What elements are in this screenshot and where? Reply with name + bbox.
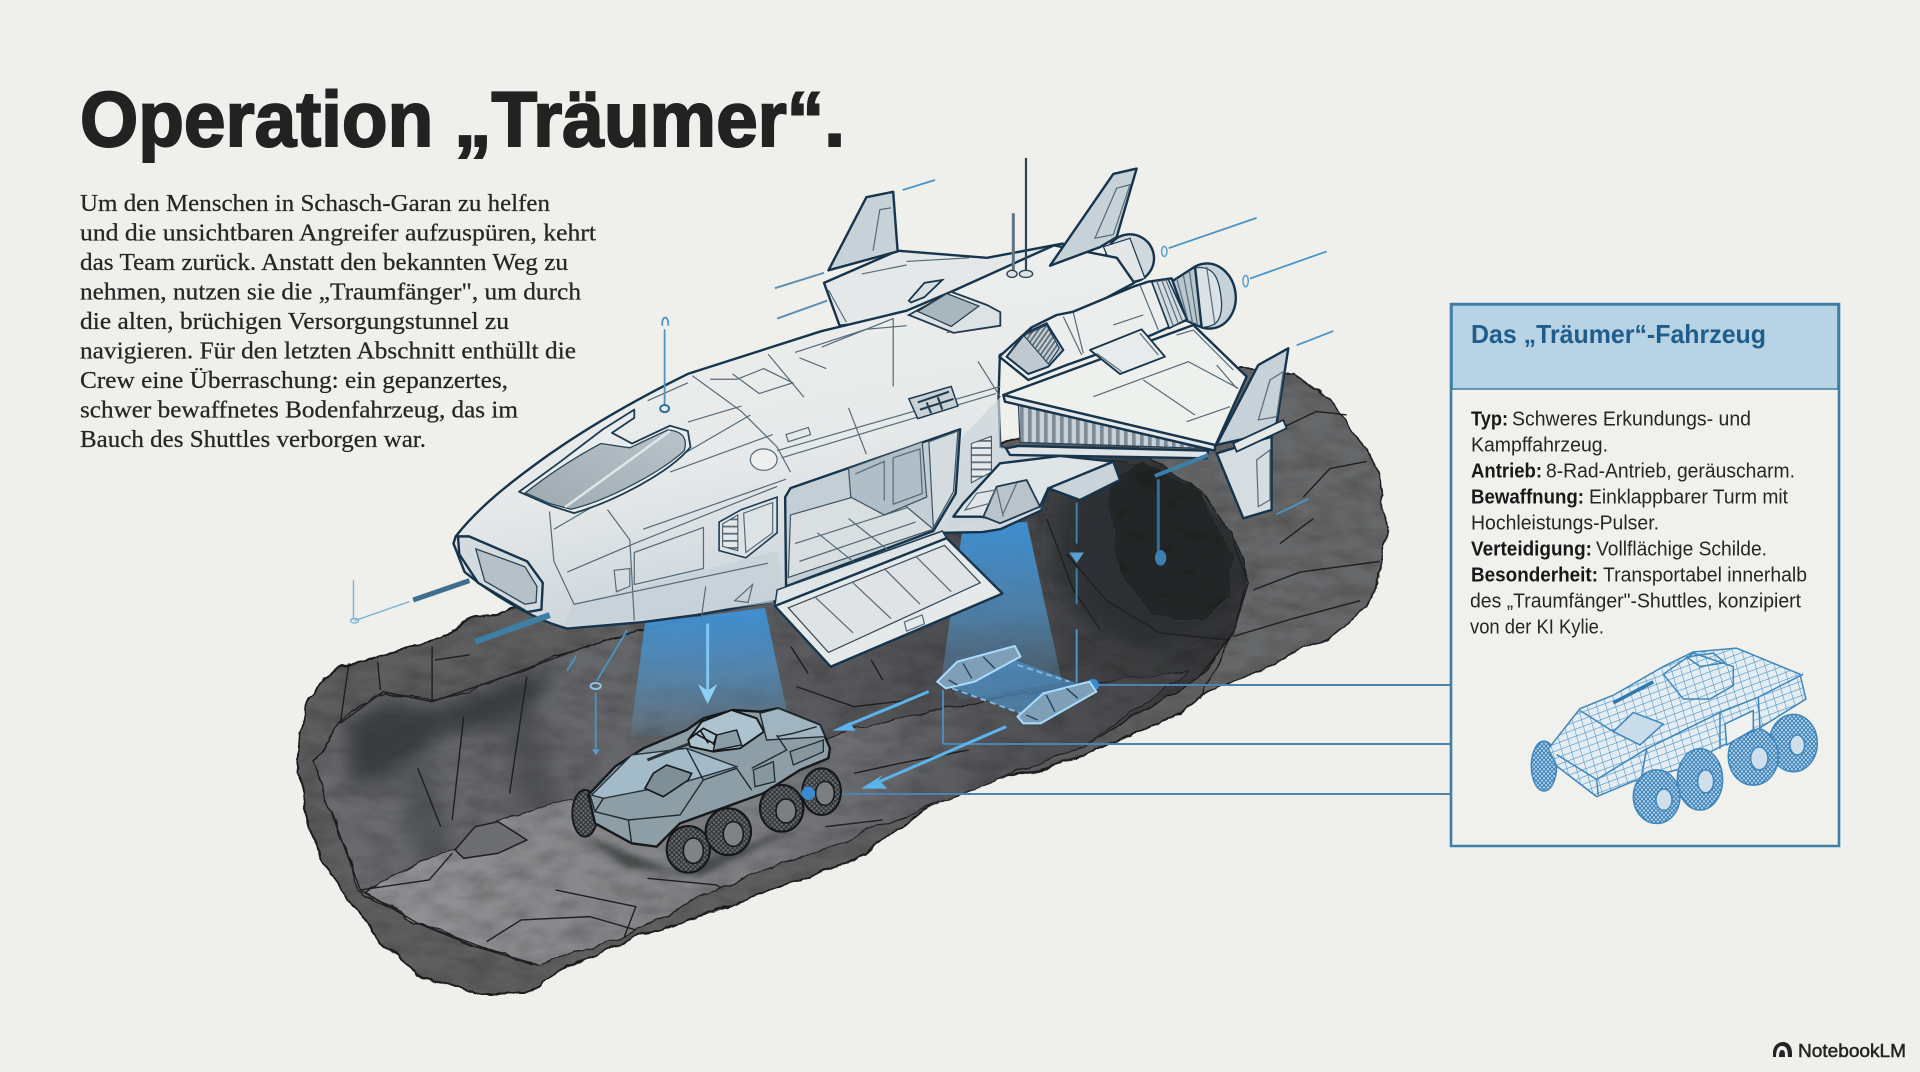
wireframe rear wheels xyxy=(1728,714,1817,785)
tunnel wall shadows xyxy=(345,665,560,790)
NotebookLM logo xyxy=(1773,1041,1906,1061)
tunnel inner wall xyxy=(314,461,1248,965)
hull body xyxy=(588,708,830,847)
top pointer xyxy=(660,318,669,412)
info panel: Das „Träumer“-Fahrzeug xyxy=(1451,304,1839,846)
hull panel lines xyxy=(549,311,1000,620)
belly box xyxy=(1048,462,1120,500)
rear wheel marker xyxy=(802,787,815,800)
specification list: Verteidigung: xyxy=(1471,538,1592,560)
wireframe front wheels xyxy=(1633,749,1723,823)
main wing xyxy=(1003,325,1247,447)
road wheels xyxy=(706,768,841,855)
hull light top xyxy=(592,748,737,798)
specification list: Einklappbarer Turm mit xyxy=(1589,486,1788,508)
tunnel floor xyxy=(366,670,1190,965)
door opening interior xyxy=(785,429,960,586)
back fin xyxy=(828,192,898,270)
specification list: Antrieb: xyxy=(1471,460,1542,482)
door back wall xyxy=(849,442,927,515)
driver hatch xyxy=(645,765,692,797)
intro text block xyxy=(80,191,596,453)
logo wordmark: NotebookLM xyxy=(1798,1041,1906,1061)
specification list: des „Traumfänger"-Shuttles, konzipiert xyxy=(1470,590,1801,612)
intro text block: Um den Menschen in Schasch-Garan zu helfen xyxy=(80,191,550,217)
intro text block: nehmen, nutzen sie die „Traumfänger", um durch xyxy=(80,280,581,306)
intro text block: Bauch des Shuttles verborgen war. xyxy=(80,427,426,453)
specification list: Vollflächige Schilde. xyxy=(1596,538,1767,560)
specification list: Besonderheit: xyxy=(1471,564,1598,586)
canopy glass xyxy=(525,430,685,509)
side hatch xyxy=(614,527,753,602)
rear engine xyxy=(1102,230,1158,287)
intro text block: das Team zurück. Anstatt den bekannten Weg zu xyxy=(80,250,568,276)
intro text block: Crew eine Überraschung: ein gepanzertes, xyxy=(80,368,508,394)
antennas xyxy=(1007,158,1033,277)
wireframe vehicle xyxy=(1531,648,1817,823)
rear upper fin xyxy=(1217,348,1288,445)
specification list: Transportabel innerhalb xyxy=(1603,564,1807,586)
rear lower fin xyxy=(1217,437,1272,518)
side vent unit xyxy=(719,497,777,558)
upper hump window xyxy=(909,292,1000,333)
panel heading: Das „Träumer“-Fahrzeug xyxy=(1471,319,1766,349)
armored ground vehicle xyxy=(572,708,843,877)
upper mount fin xyxy=(1050,169,1137,266)
panel header xyxy=(1452,305,1838,389)
belly fairing xyxy=(953,456,1120,518)
belly pod xyxy=(983,480,1040,523)
rock outer silhouette xyxy=(297,369,1387,993)
tunnel far end glow shadow xyxy=(1055,445,1245,645)
control panel xyxy=(909,386,958,419)
specification list: Bewaffnung: xyxy=(1471,486,1584,508)
pad area xyxy=(943,660,1078,713)
intro text block: die alten, brüchigen Versorgungstunnel zu xyxy=(80,309,509,335)
arrow middle xyxy=(832,692,929,731)
door hinge strip xyxy=(775,531,947,606)
wing leading edge xyxy=(1003,395,1215,451)
shuttle main hull xyxy=(453,245,1134,667)
specification list: Typ: xyxy=(1471,408,1508,430)
intro text block: navigieren. Für den letzten Abschnitt enthüllt die xyxy=(80,338,576,364)
left landing pad xyxy=(937,646,1020,688)
wireframe front left wheel xyxy=(1531,741,1557,791)
tunnel end rim xyxy=(1130,369,1387,697)
intro text block: schwer bewaffnetes Bodenfahrzeug, das im xyxy=(80,398,518,424)
front road wheel xyxy=(667,826,710,873)
engine intake xyxy=(1007,323,1063,374)
rock tunnel xyxy=(297,369,1387,993)
ground shadow xyxy=(580,813,843,877)
wireframe side door xyxy=(1725,711,1753,745)
hull side shading xyxy=(565,551,784,626)
panel frame xyxy=(1451,304,1839,846)
side panels xyxy=(753,740,823,787)
specification list: 8-Rad-Antrieb, geräuscharm. xyxy=(1546,460,1795,482)
intro text block: und die unsichtbaren Angreifer aufzuspüren, kehrt xyxy=(80,220,596,246)
specification list xyxy=(1470,408,1807,638)
engine nozzle xyxy=(1177,260,1240,332)
rock cracks right end xyxy=(1047,411,1380,676)
fins, antennas and leaders xyxy=(903,158,1333,683)
specification list: Schweres Erkundungs- und xyxy=(1512,408,1751,430)
door floor xyxy=(788,488,933,577)
turret xyxy=(688,710,764,752)
landing pads and direction arrows xyxy=(567,623,1096,789)
wireframe body xyxy=(1548,648,1806,797)
callout connector lines xyxy=(808,679,1450,794)
callout hook under nose xyxy=(567,630,627,755)
wireframe hatch xyxy=(1613,712,1663,745)
specification list: Hochleistungs-Pulser. xyxy=(1471,512,1659,534)
wing strut xyxy=(1006,446,1208,458)
intake grille xyxy=(1024,325,1059,364)
logo icon xyxy=(1773,1042,1792,1057)
hull outline xyxy=(453,245,1134,629)
engine neck xyxy=(1172,267,1202,327)
rear assembly: wing, engine, fins xyxy=(953,260,1288,523)
fin joint xyxy=(1233,420,1287,452)
rear deck xyxy=(760,708,825,740)
right landing pad xyxy=(1018,682,1096,723)
tunnel far end dark hole xyxy=(1110,461,1230,622)
blue beam right xyxy=(942,522,1062,700)
engine pylon xyxy=(1090,329,1165,374)
cannon xyxy=(647,744,688,760)
title: Operation „Träumer“. xyxy=(80,75,845,163)
specification list: von der KI Kylie. xyxy=(1470,616,1604,638)
rock cracks and ledges xyxy=(332,645,969,965)
rear side vent xyxy=(971,436,991,483)
hanging probes xyxy=(1069,479,1166,683)
ramp xyxy=(775,538,1003,667)
hull top callouts and nose guns xyxy=(351,318,669,642)
arrow down into tunnel xyxy=(698,623,717,704)
back wing and fin xyxy=(775,192,1067,326)
tunnel wall vertical streaks xyxy=(400,700,560,880)
back wing cannons xyxy=(775,273,827,319)
canopy frame xyxy=(519,410,691,513)
wireframe turret xyxy=(1663,653,1733,699)
wing grille xyxy=(1018,403,1202,448)
engine rings xyxy=(1152,279,1187,328)
rear rod xyxy=(1155,455,1208,476)
engine tube xyxy=(999,278,1187,380)
blue beam left xyxy=(630,608,787,737)
nose face xyxy=(458,536,543,612)
front left wheel xyxy=(572,790,598,837)
specification list: Kampffahrzeug. xyxy=(1471,434,1608,456)
nose guns xyxy=(351,580,550,642)
arrow lower xyxy=(861,727,1006,789)
wheels re-drawn front xyxy=(706,785,803,855)
callout leader lines xyxy=(903,180,1333,514)
